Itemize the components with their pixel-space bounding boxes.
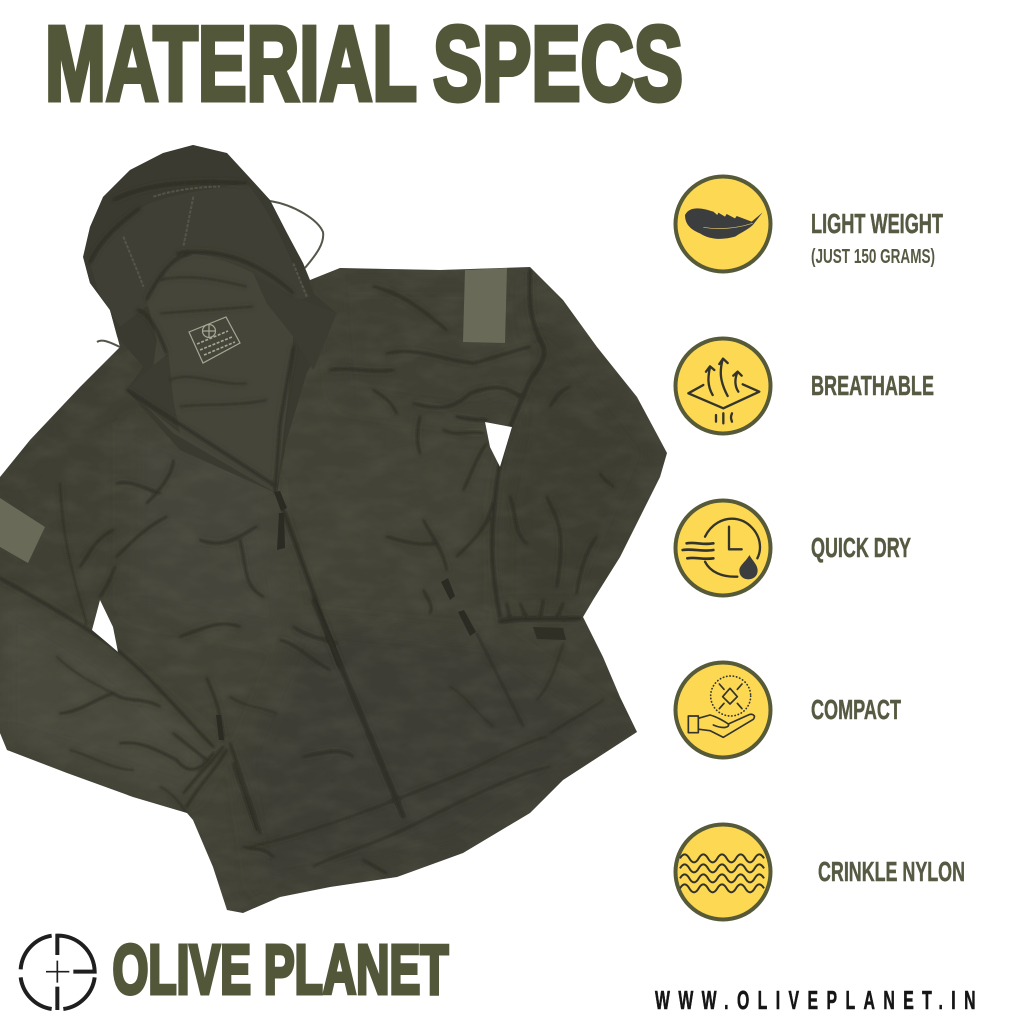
sleeve patch lower left [0, 498, 45, 563]
icon: feather [676, 176, 770, 272]
website url: WWW.OLIVEPLANET.IN [655, 987, 976, 1015]
label: compact: COMPACT [811, 694, 901, 725]
title: SPECS [433, 5, 683, 123]
spec row: quick dry [676, 500, 911, 596]
title: MATERIAL [45, 5, 417, 123]
brand name: OLIVE PLANET [112, 930, 448, 1008]
jacket photo [0, 140, 680, 920]
dark wrinkles lower left [0, 460, 340, 857]
label: quick dry: QUICK DRY [811, 532, 911, 563]
jacket shading and wrinkles [0, 140, 680, 920]
label: light weight: LIGHT WEIGHT [811, 208, 943, 239]
icon: hand with compressed diamond [676, 662, 770, 758]
hood [83, 145, 337, 493]
spec row: crinkle nylon [676, 824, 965, 920]
hood drawcord [97, 201, 323, 347]
icon: crinkle waves [676, 824, 770, 920]
spec row: light weight [676, 176, 943, 272]
crinkle texture [110, 410, 608, 845]
sublabel: just 150 grams: (JUST 150 GRAMS) [811, 245, 935, 268]
brand logo [21, 930, 448, 1010]
spec row: breathable [676, 338, 934, 434]
jacket silhouette [0, 145, 667, 913]
cuff tab [533, 627, 566, 640]
dark wrinkles hem [230, 600, 603, 873]
icon: clock and drop [676, 500, 770, 596]
zipper pullers [216, 491, 476, 740]
dark wrinkles right [330, 270, 613, 622]
neck label [189, 317, 240, 363]
label: breathable: BREATHABLE [811, 370, 934, 401]
icon: breathable fabric [676, 338, 770, 434]
tone patches [0, 422, 666, 867]
icon: crosshair mark [21, 936, 95, 1010]
sleeve patch upper right [463, 268, 507, 343]
spec row: compact [676, 662, 901, 758]
